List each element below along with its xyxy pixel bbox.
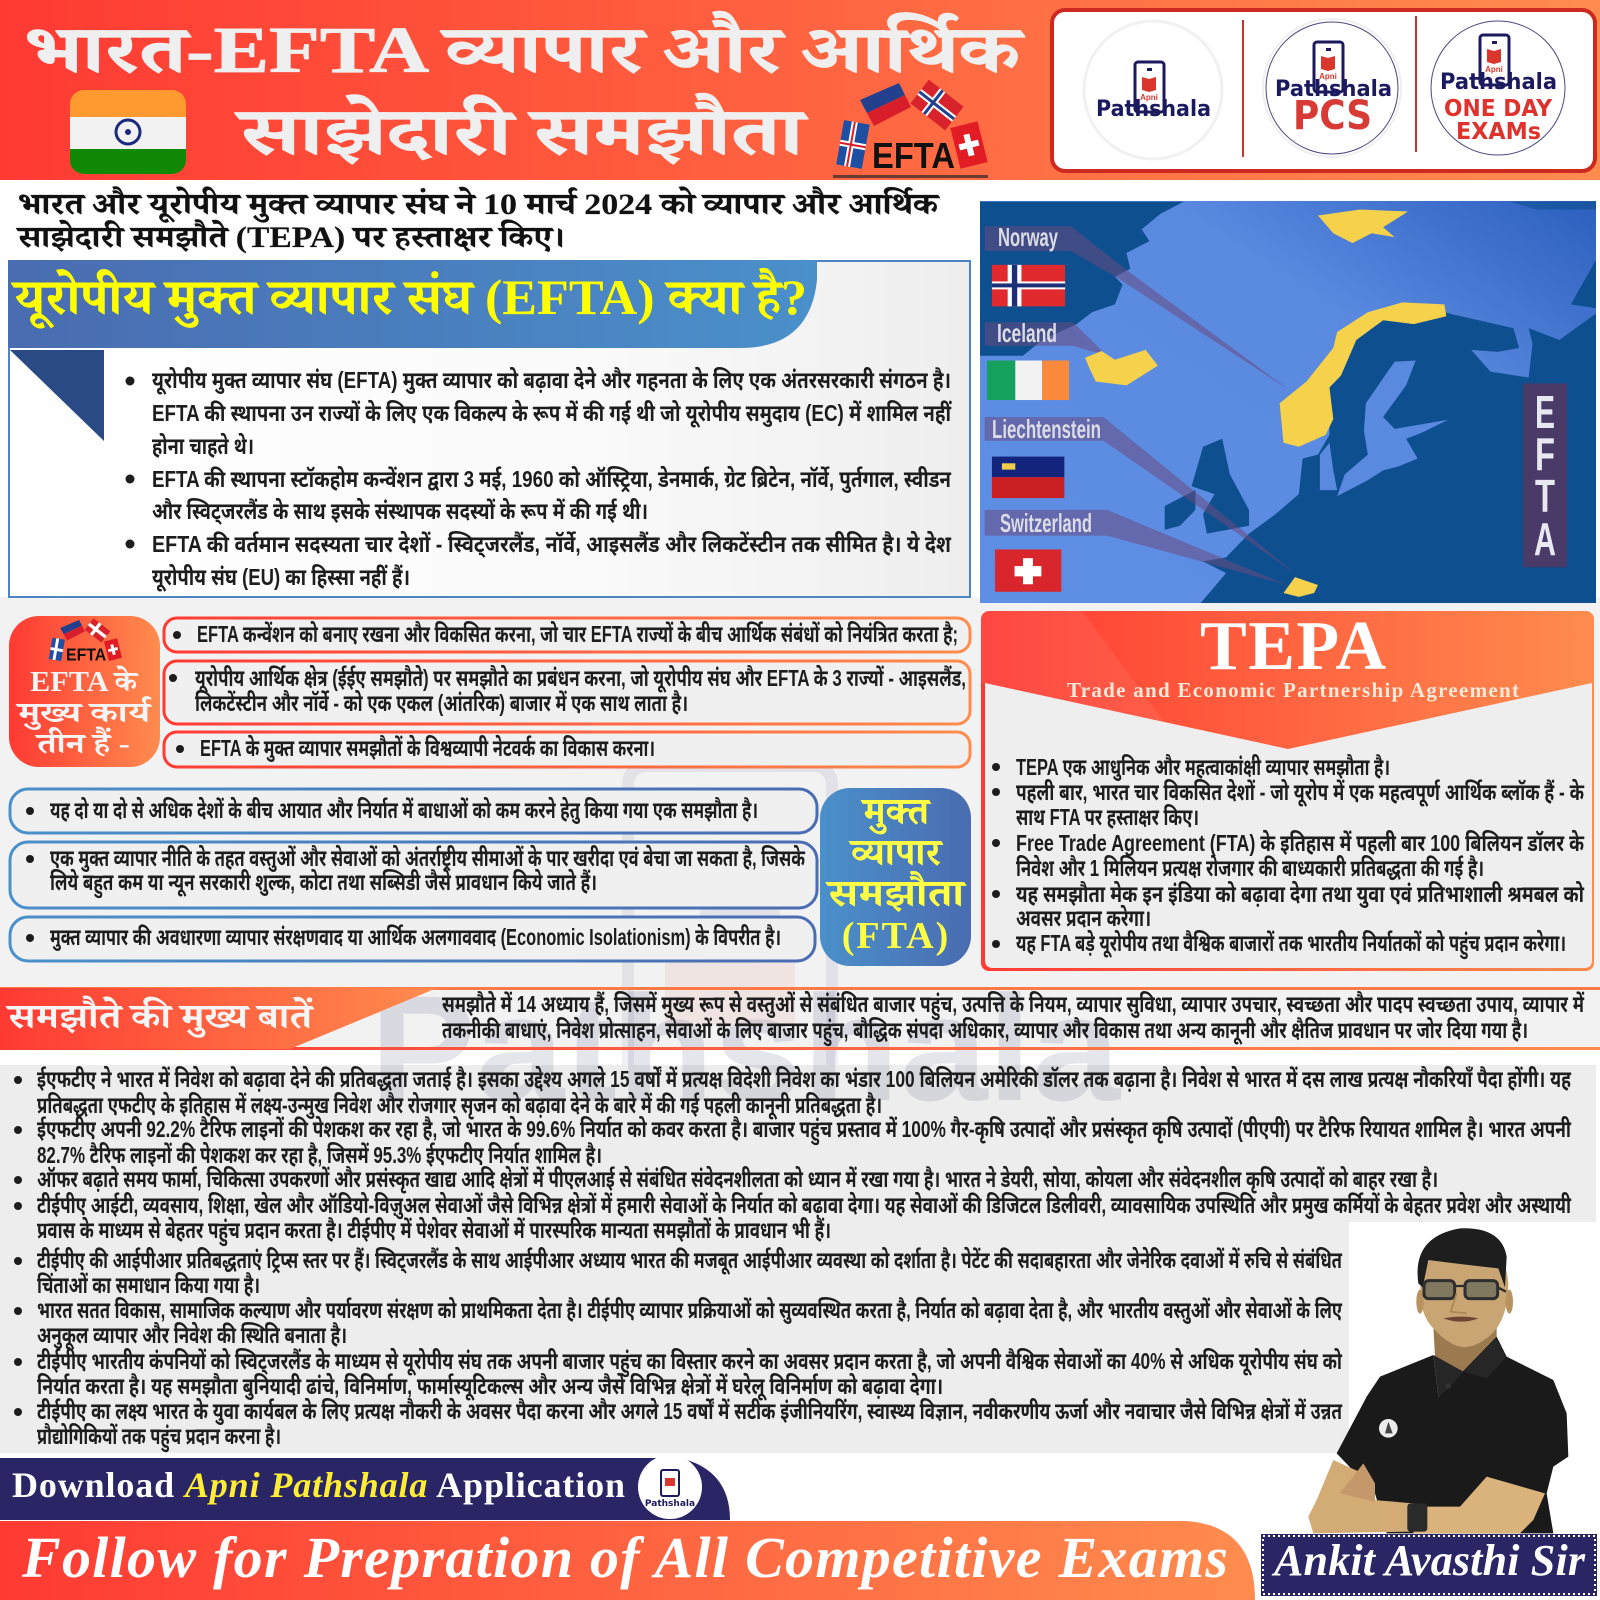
bullet list: key points: प्रौद्योगिकियों तक पहुंच प्रदान करना है। bbox=[37, 1423, 281, 1453]
map: EFTA member countries: Iceland bbox=[997, 318, 1057, 348]
panel: main points body background bbox=[0, 1065, 1596, 1453]
logo: Pathshala One Day Exams bbox=[1431, 21, 1565, 155]
follow banner: Follow for Prepration of All Competitive Exams bbox=[21, 1525, 1228, 1590]
watermark bbox=[628, 766, 832, 1096]
panel: FTA points bbox=[10, 789, 817, 961]
map: EFTA member countries: E bbox=[1535, 386, 1555, 438]
title: साझेदारी समझौता bbox=[235, 94, 809, 169]
panel: TEPA bbox=[981, 608, 1594, 971]
logo: app icon bbox=[638, 1455, 702, 1519]
map: EFTA member countries: Norway bbox=[998, 222, 1058, 252]
logo: Apni Pathshala bbox=[1084, 21, 1222, 159]
intro text: साझेदारी समझौते (TEPA) पर हस्ताक्षर किए। bbox=[16, 219, 565, 254]
intro text: भारत और यूरोपीय मुक्त व्यापार संघ ने 10 मार्च 2024 को व्यापार और आर्थिक bbox=[18, 186, 940, 224]
icon: small EFTA logo bbox=[49, 618, 122, 665]
header band bbox=[0, 0, 1600, 180]
panel: EFTA functions list: यूरोपीय आर्थिक क्षेत्र (ईईए समझौते) पर समझौते का प्रबंधन करना, जो यूरोपीय संघ और EFTA के 3 राज्यों - आइसलैंड, bbox=[195, 665, 966, 693]
panel: EFTA main functions label: तीन हैं - bbox=[35, 726, 130, 760]
map: EFTA member countries: F bbox=[1535, 428, 1555, 480]
bullet list: key points: 82.7% टैरिफ लाइनों की पेशकश कर रहा है, जिसमें 95.3% ईएफटीए निर्यात शामिल है। bbox=[37, 1142, 602, 1168]
panel: FTA label bbox=[820, 788, 971, 966]
bullet list: साथ FTA पर हस्ताक्षर किए। bbox=[1016, 804, 1199, 830]
logo: Pathshala One Day Exams: Pathshala bbox=[1440, 70, 1557, 95]
panel: EFTA main functions label: EFTA के bbox=[30, 665, 140, 698]
logo: Pathshala One Day Exams: Apni bbox=[1485, 65, 1503, 74]
bullet list: key points: निर्यात करता है। यह समझौता बुनियादी ढांचे, विनिर्माण, फार्मास्यूटिकल्स और अन्य जैसे विभिन्न क्षेत्रों में घरेलू विनिर्माण को बढ़ावा देगा। bbox=[37, 1373, 943, 1401]
beams bbox=[985, 226, 1295, 585]
panel: FTA points: एक मुक्त व्यापार नीति के तहत वस्तुओं और सेवाओं को अंतर्राष्ट्रीय सीमाओं के पार खरीदा एवं बेचा जा सकता है, जिसके bbox=[50, 845, 806, 872]
title: भारत-EFTA व्यापार और आर्थिक bbox=[25, 12, 1025, 87]
bullet list: EFTA की वर्तमान सदस्यता चार देशों - स्विट्जरलैंड, नॉर्वे, आइसलैंड और लिकटेंस्टीन तक सीमित है। ये देश bbox=[152, 531, 951, 558]
heading: यूरोपीय मुक्त व्यापार संघ (EFTA) क्या है? bbox=[11, 268, 807, 328]
panel: FTA label: समझौता bbox=[825, 870, 967, 915]
map: EFTA member countries: A bbox=[1534, 513, 1556, 565]
photo: presenter bbox=[1308, 1228, 1568, 1533]
panel: FTA points: मुक्त व्यापार की अवधारणा व्यापार संरक्षणवाद या आर्थिक अलगाववाद (Economic Isolationism) के विपरीत है। bbox=[50, 924, 781, 951]
bullet list: key points bbox=[14, 1066, 1572, 1453]
panel: EFTA functions list: EFTA के मुक्त व्यापार समझौतों के विश्वव्यापी नेटवर्क का विकास करना। bbox=[200, 735, 655, 762]
bullet list: key points: अनुकूल व्यापार और निवेश की स्थिति बनाता है। bbox=[37, 1322, 347, 1350]
intro text bbox=[16, 186, 940, 254]
bullet list: key points: प्रतिबद्धता एफटीए के इतिहास में लक्ष्य-उन्मुख निवेश और रोजगार सृजन को बढ़ावा देने के बारे में की गई पहली कानूनी प्रतिबद्धता है। bbox=[37, 1092, 882, 1120]
bullet list: EFTA की स्थापना उन राज्यों के लिए एक विकल्प के रूप में की गई थी जो यूरोपीय समुदाय (EC) में शामिल नहीं bbox=[152, 400, 952, 428]
heading: Trade and Economic Partnership Agreement bbox=[1067, 678, 1519, 702]
map: EFTA member countries bbox=[977, 201, 1598, 605]
icon: EFTA flags logo: EFTA bbox=[872, 135, 955, 176]
bullet list: अवसर प्रदान करेगा। bbox=[1016, 905, 1151, 931]
panel: agreement key points band: समझौते की मुख्य बातें bbox=[5, 995, 315, 1038]
flags bbox=[987, 265, 1069, 592]
band paragraph bbox=[442, 991, 1585, 1047]
download banner bbox=[0, 1455, 730, 1520]
logo: Pathshala PCS bbox=[1263, 19, 1401, 157]
bullet list: यूरोपीय संघ (EU) का हिस्सा नहीं हैं। bbox=[152, 564, 410, 592]
logo: Apni Pathshala: Apni bbox=[1140, 93, 1158, 102]
logo: Pathshala PCS: Apni bbox=[1319, 72, 1337, 81]
corner triangle bbox=[10, 350, 104, 441]
panel: EFTA main functions label bbox=[9, 616, 160, 767]
logo: Pathshala PCS: PCS bbox=[1293, 93, 1372, 139]
download banner: Download Apni Pathshala Application bbox=[12, 1465, 625, 1505]
heading: TEPA bbox=[1200, 608, 1386, 685]
logo: Pathshala One Day Exams: ONE DAY bbox=[1444, 96, 1552, 122]
bullet list: key points: प्रवास के माध्यम से बेहतर पहुंच प्रदान करता है। टीईपीए में पेशेवर सेवाओं में पारस्परिक मान्यता समझौतों के प्रावधान भी हैं। bbox=[37, 1217, 831, 1247]
heading bbox=[1067, 608, 1519, 702]
logo: Pathshala One Day Exams: EXAMs bbox=[1456, 119, 1541, 145]
map: EFTA member countries: Liechtenstein bbox=[992, 414, 1101, 444]
bullet list bbox=[992, 754, 1585, 960]
title bbox=[25, 12, 1025, 169]
panel: logos bbox=[1052, 10, 1595, 171]
panel: FTA label: (FTA) bbox=[842, 915, 950, 957]
panel: FTA label: मुक्त bbox=[860, 791, 931, 836]
panel: EFTA main functions label: मुख्य कार्य bbox=[15, 696, 153, 731]
icon: EFTA flags logo bbox=[833, 80, 988, 178]
heading bbox=[8, 260, 817, 348]
panel: FTA label: व्यापार bbox=[848, 832, 943, 874]
name plate: Ankit Avasthi Sir bbox=[1271, 1536, 1586, 1585]
map: EFTA member countries: Switzerland bbox=[1000, 508, 1092, 538]
watermark word: Pathshala bbox=[370, 964, 1122, 1132]
panel: EFTA functions list: लिकटेंस्टीन और नॉर्वे - को एक एकल (आंतरिक) बाजार में एक साथ लाता है। bbox=[195, 690, 688, 716]
map: EFTA member countries: T bbox=[1535, 470, 1555, 522]
bullet list: और स्विट्जरलैंड के साथ इसके संस्थापक सदस्यों के रूप में की गई थी। bbox=[152, 498, 648, 525]
logo: app icon: Pathshala bbox=[645, 1499, 695, 1509]
panel: FTA points: यह दो या दो से अधिक देशों के बीच आयात और निर्यात में बाधाओं को कम करने हेतु किया गया एक समझौता है। bbox=[50, 797, 758, 824]
bullet list: key points: चिंताओं का समाधान किया गया है। bbox=[37, 1272, 260, 1298]
panel: agreement key points band bbox=[0, 987, 1600, 1050]
icon: India flag bbox=[70, 90, 186, 174]
bullet list: यूरोपीय मुक्त व्यापार संघ (EFTA) मुक्त व्यापार को बढ़ावा देने और गहनता के लिए एक अंतरसरकारी संगठन है। bbox=[152, 367, 951, 395]
panel: FTA points: लिये बहुत कम या न्यून सरकारी शुल्क, कोटा तथा सब्सिडी जैसे प्रावधान किये जाते हैं। bbox=[50, 869, 597, 899]
logo: Apni Pathshala: Pathshala bbox=[1096, 97, 1211, 122]
bullet list bbox=[126, 367, 952, 592]
panel: what is EFTA bbox=[8, 260, 970, 597]
panel: EFTA functions list: EFTA कन्वेंशन को बनाए रखना और विकसित करना, जो चार EFTA राज्यों के बीच आर्थिक संबंधों को नियंत्रित करता है; bbox=[197, 621, 958, 647]
bullet list: TEPA एक आधुनिक और महत्वाकांक्षी व्यापार समझौता है। bbox=[1016, 754, 1390, 781]
bullet list: EFTA की स्थापना स्टॉकहोम कन्वेंशन द्वारा 3 मई, 1960 को ऑस्ट्रिया, डेनमार्क, ग्रेट ब्रिटेन, नॉर्वे, पुर्तगाल, स्वीडन bbox=[152, 466, 952, 493]
icon: small EFTA logo: EFTA bbox=[66, 645, 107, 665]
logo: Pathshala PCS: Pathshala bbox=[1275, 77, 1392, 102]
panel: EFTA functions list bbox=[164, 618, 970, 767]
bullet list: होना चाहते थे। bbox=[152, 433, 254, 459]
